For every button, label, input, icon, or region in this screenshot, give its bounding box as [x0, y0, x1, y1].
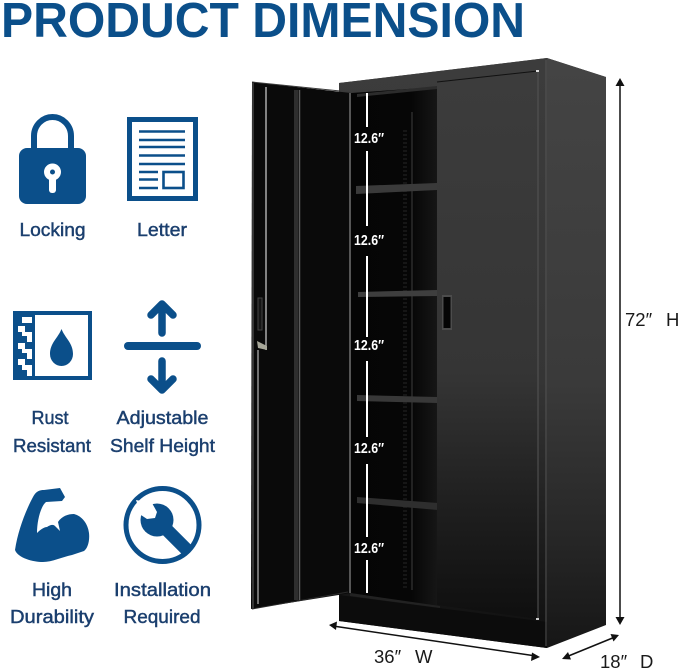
label: 72 H: H	[666, 309, 679, 330]
cabinet side panel	[547, 58, 606, 648]
label: Rust Resistant: Rust	[32, 407, 68, 428]
shelf 3	[357, 395, 437, 403]
cabinet front frame	[339, 58, 547, 648]
label: Rust Resistant	[13, 407, 91, 456]
cabinet top	[339, 58, 606, 96]
shelf spacing measurements	[354, 93, 384, 593]
label: Letter: Letter	[137, 219, 187, 240]
shelf spacing measurements: 12.6″	[354, 337, 384, 354]
feature icons panel	[10, 117, 215, 627]
label: 36 W: W	[415, 646, 433, 667]
label: Adjustable Shelf Height: Adjustable	[116, 407, 208, 428]
shelf spacing measurements: 12.6″	[354, 130, 384, 147]
cabinet interior	[350, 86, 440, 608]
shelf 1	[356, 183, 437, 194]
label: Installation Required	[114, 579, 211, 627]
icon: rust resistant panel	[15, 313, 90, 378]
icon: adjustable height arrows	[128, 304, 197, 390]
door lock	[257, 341, 267, 350]
label: Installation Required: Required	[124, 606, 200, 627]
shelf spacing measurements: 12.6″	[354, 540, 384, 557]
label: Installation Required: Installation	[114, 579, 211, 600]
cabinet photo	[251, 58, 606, 648]
label: 72 H: 72″	[625, 309, 653, 330]
door handle	[442, 295, 452, 330]
arrow: height	[616, 78, 624, 625]
shelf spacing measurements: 12.6″	[354, 232, 384, 249]
icon: letter document	[130, 120, 196, 198]
label: High Durability: Durability	[10, 606, 95, 627]
open left door	[251, 82, 351, 609]
shelf 2	[358, 290, 437, 297]
cabinet plinth	[339, 595, 547, 648]
label: Locking: Locking	[20, 219, 86, 240]
label: Adjustable Shelf Height: Shelf Height	[110, 435, 215, 456]
door inner handle	[258, 298, 262, 330]
shelf spacing measurements: 12.6″	[354, 440, 384, 457]
right door	[437, 60, 546, 646]
icon: flexed arm	[15, 488, 89, 562]
label: Rust Resistant: Resistant	[13, 435, 91, 456]
label: 36 W: 36″	[374, 646, 402, 667]
arrow: width	[329, 622, 540, 661]
icon: padlock	[19, 117, 86, 204]
label: High Durability	[10, 579, 95, 627]
label: High Durability: High	[32, 579, 72, 600]
arrow: depth	[562, 634, 619, 660]
shelf 4	[357, 497, 438, 510]
label: Adjustable Shelf Height	[110, 407, 215, 456]
icon: wrench in circle	[126, 488, 199, 562]
